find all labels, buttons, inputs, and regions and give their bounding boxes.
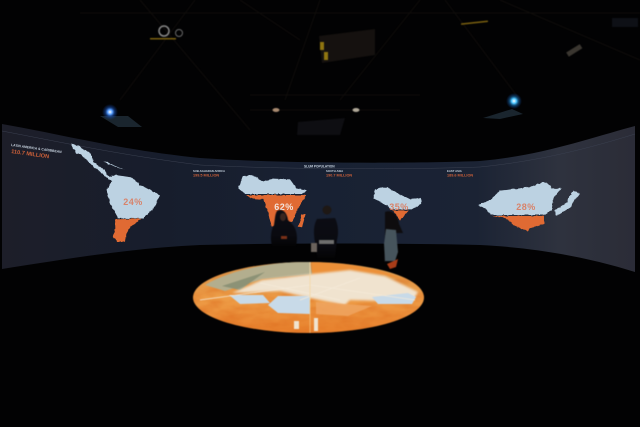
visitor: left woman (271, 210, 297, 246)
region captions: SUB-SAHARAN AFRICA (193, 169, 225, 173)
percentage labels: 24% (123, 197, 143, 207)
screen timeline line (2, 131, 635, 169)
map: Latin America (71, 143, 160, 242)
floor map disc (193, 261, 424, 333)
map: Africa (238, 175, 307, 227)
region captions: SLUM POPULATION (304, 164, 335, 168)
centre lights (272, 108, 280, 112)
percentage labels (123, 197, 536, 212)
region captions: LATIN AMERICA & CARIBBEAN (11, 143, 62, 154)
left projector (100, 104, 142, 127)
region captions: 110.7 MILLION (11, 149, 49, 160)
percentage labels: 28% (516, 202, 536, 212)
ceiling rig (80, 0, 640, 135)
region captions: 199.5 MILLION (193, 174, 219, 178)
region captions (11, 143, 473, 178)
ceiling panel (319, 29, 375, 63)
percentage labels: 62% (274, 202, 294, 212)
right projector (483, 93, 523, 119)
percentage labels: 35% (389, 202, 409, 212)
visitor: right woman (384, 211, 403, 269)
region captions: 190.7 MILLION (326, 174, 352, 178)
wall fixture (566, 44, 582, 57)
map: South Asia (373, 187, 422, 221)
curved projection screen (2, 124, 635, 272)
right yellow strip (461, 21, 488, 25)
region captions: SOUTH ASIA (326, 169, 343, 173)
region captions: 189.6 MILLION (447, 174, 473, 178)
left ceiling lamps (150, 26, 182, 40)
exhibition photo scene (2, 12, 638, 334)
visitor: centre man (311, 206, 338, 258)
map: East Asia (478, 182, 580, 232)
region captions: EAST ASIA (447, 169, 462, 173)
